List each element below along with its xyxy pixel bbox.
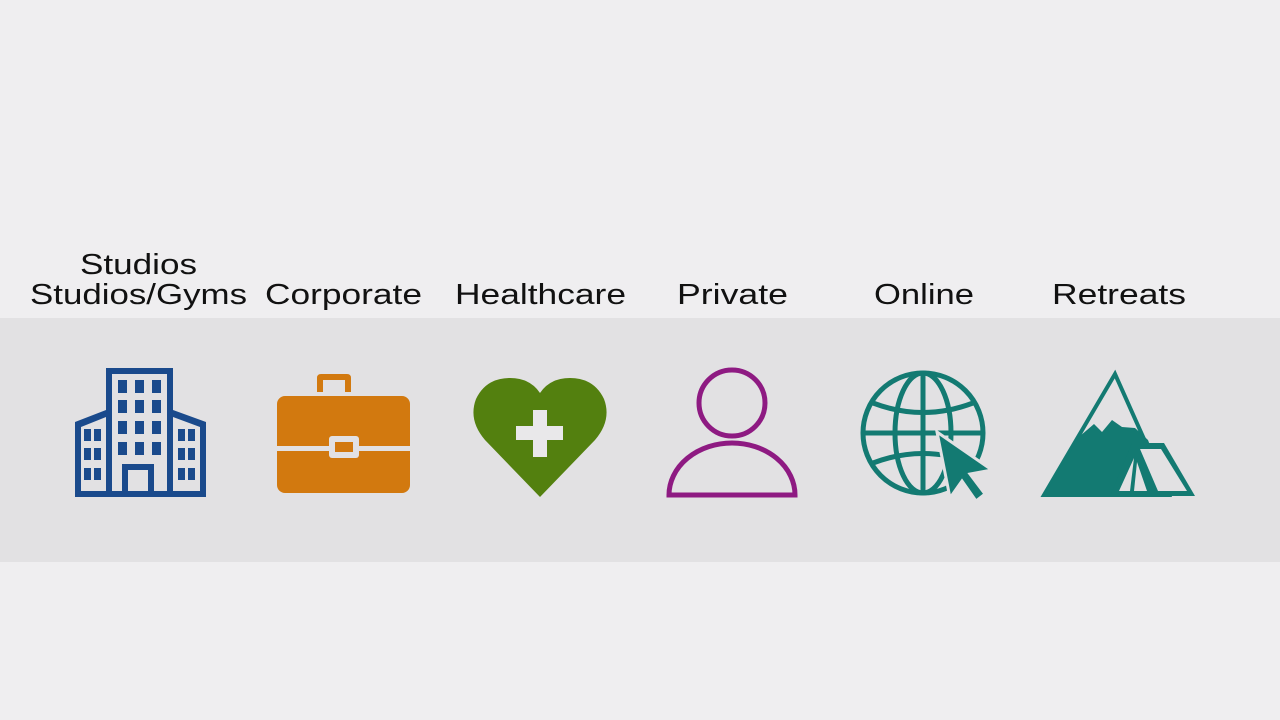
labels: Retreats — [1052, 279, 1186, 311]
labels: Studios/Gyms — [30, 279, 247, 311]
labels: Studios — [80, 249, 197, 281]
icon: building — [75, 368, 206, 497]
labels — [30, 249, 1186, 311]
labels: Private — [677, 279, 788, 311]
labels: Online — [874, 279, 974, 311]
icon: briefcase — [277, 374, 410, 493]
icon: person — [669, 370, 795, 495]
labels: Healthcare — [455, 279, 626, 311]
icon: globe with cursor — [863, 373, 992, 501]
band panel — [0, 318, 1280, 562]
icon: heart with cross — [473, 378, 607, 497]
icon: mountain with tent — [1044, 374, 1195, 496]
labels: Corporate — [265, 279, 422, 311]
